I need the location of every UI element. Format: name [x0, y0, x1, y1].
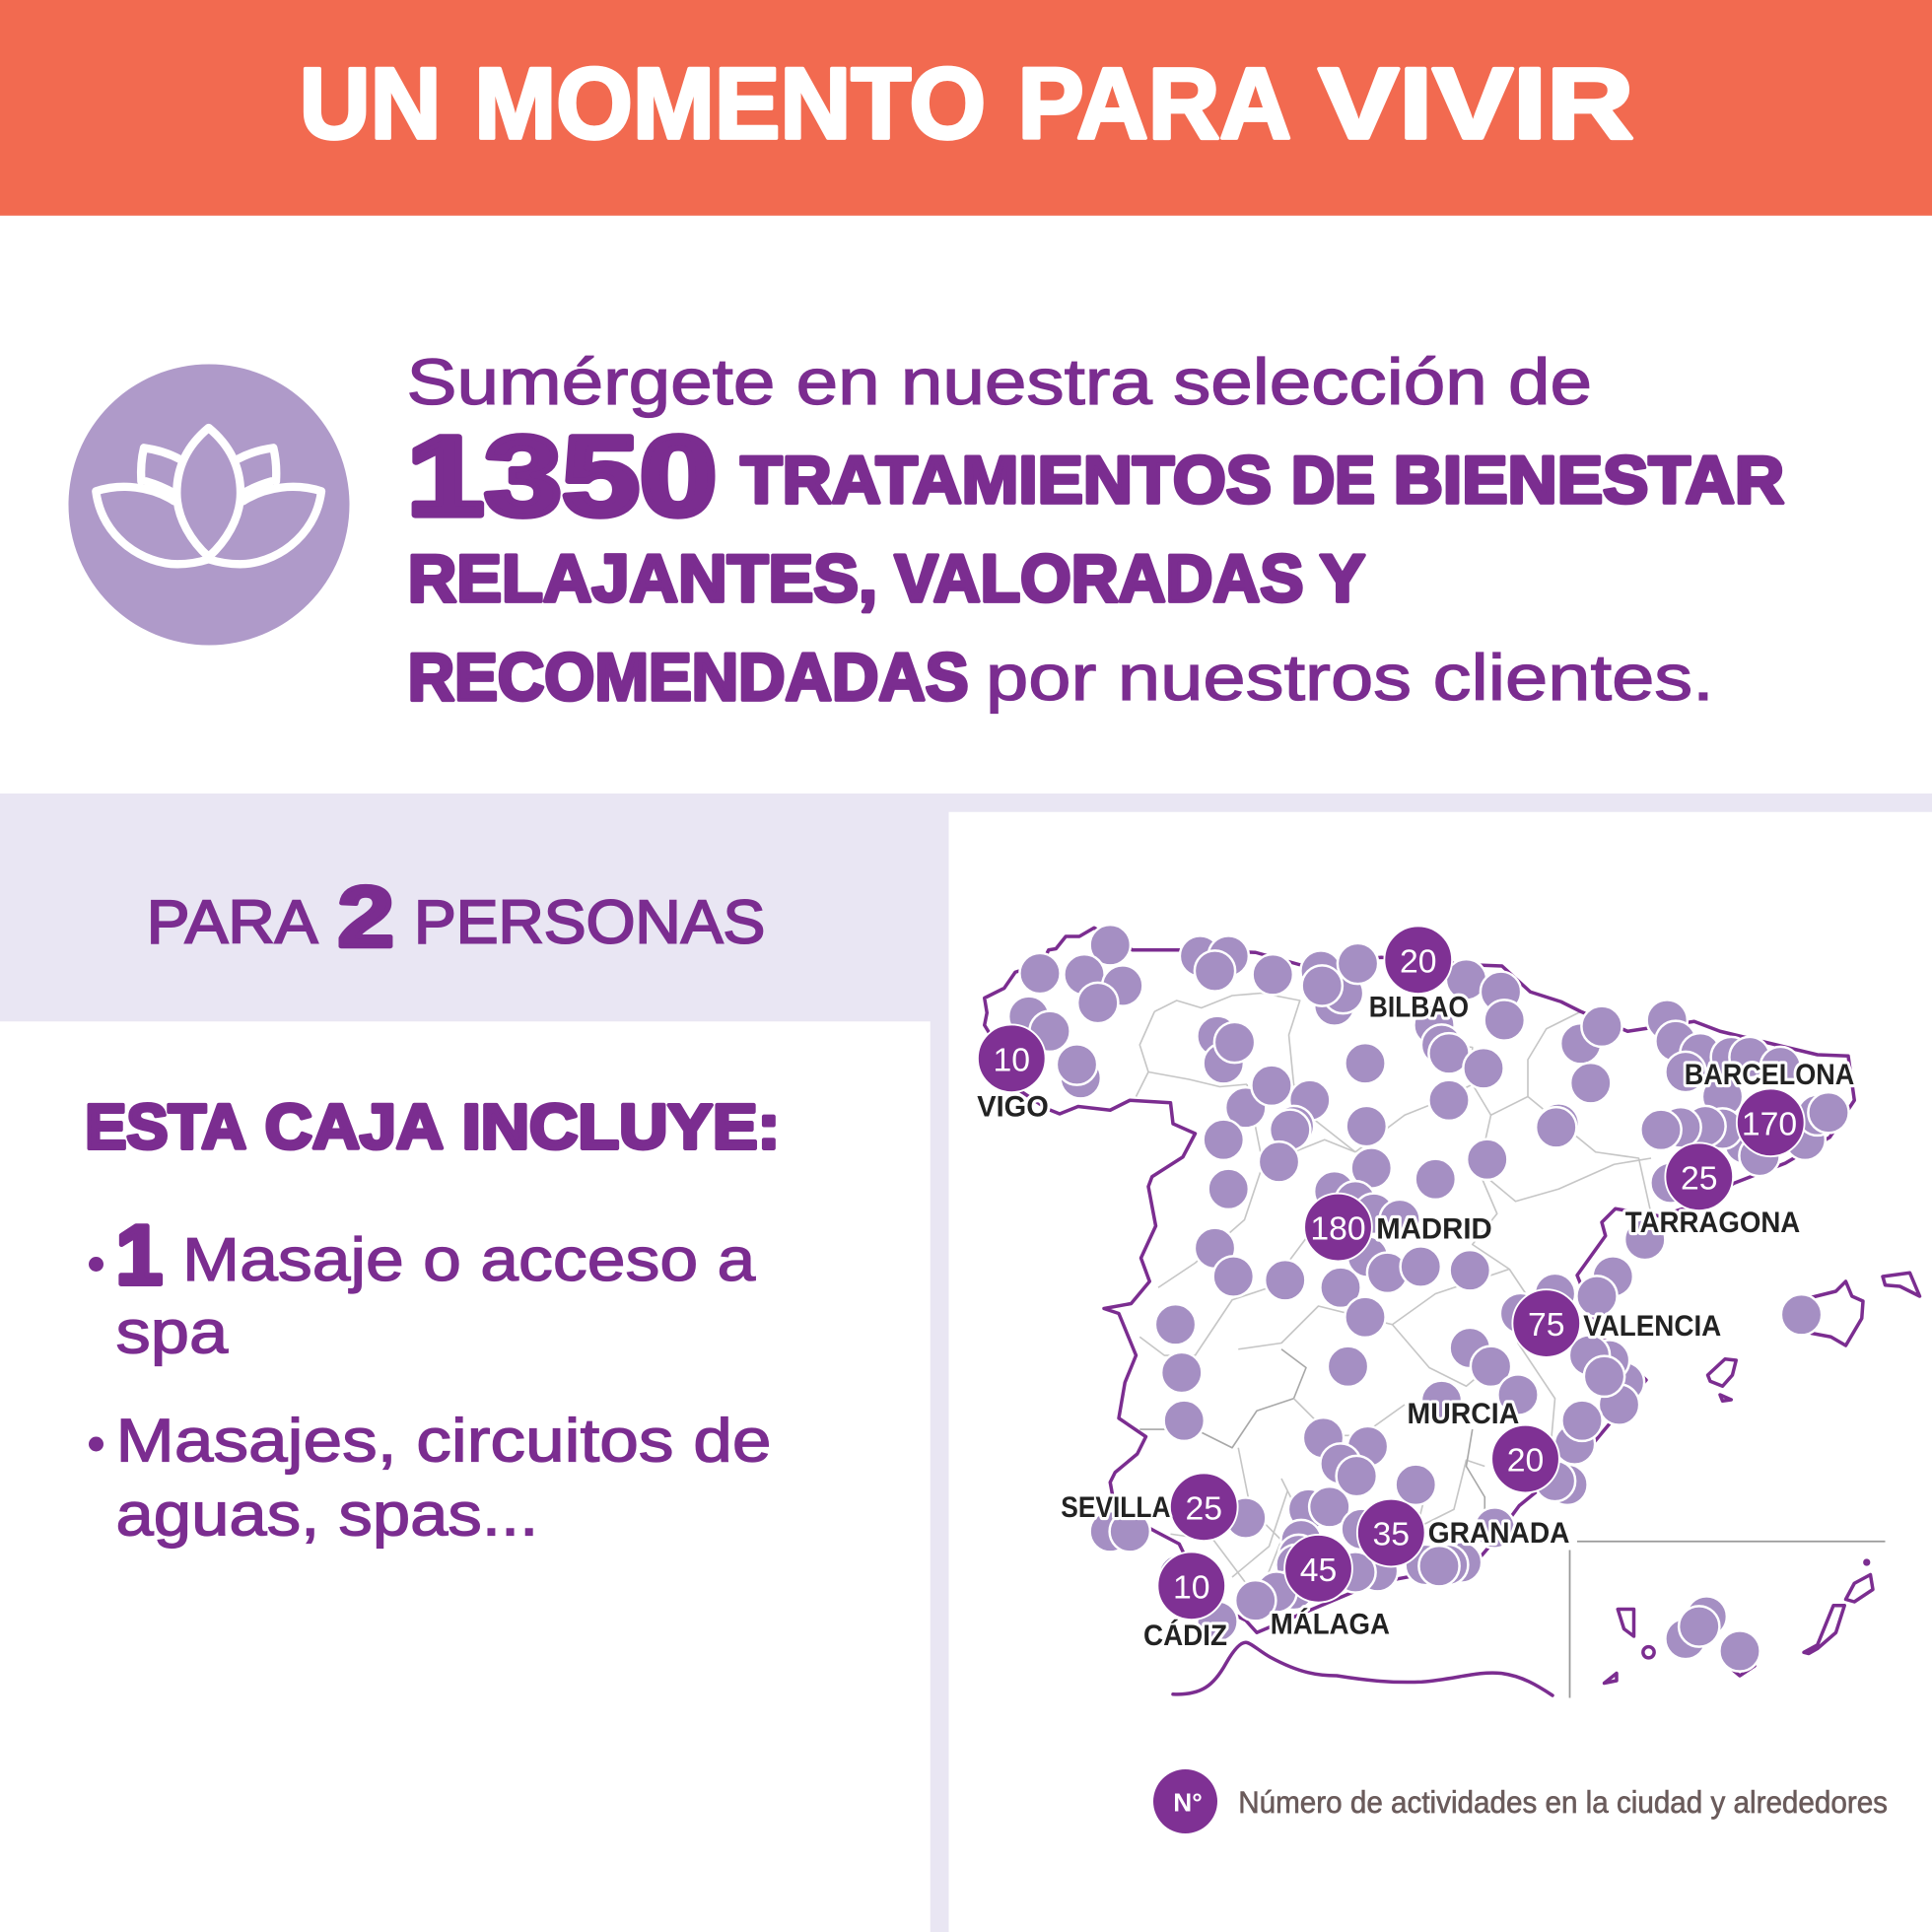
- city counts: 20: [1507, 1441, 1544, 1479]
- city counts: 180: [1310, 1210, 1366, 1247]
- canary inset frame: [1569, 1542, 1885, 1697]
- icon: lotus: [69, 365, 350, 645]
- city counts: 45: [1300, 1552, 1337, 1589]
- coast of Africa: [1173, 1642, 1552, 1695]
- city labels: BILBAO: [1369, 991, 1469, 1023]
- intro line 3: Y: [1320, 542, 1365, 616]
- canary islands: [1605, 1560, 1873, 1684]
- list item 1: [89, 1208, 756, 1367]
- title: PARA: [1017, 46, 1291, 160]
- intro text: [406, 346, 1784, 715]
- legend: [1153, 1769, 1888, 1833]
- title: [300, 46, 1634, 160]
- heading: para 2 personas: PARA: [147, 887, 318, 956]
- title: VIVIR: [1319, 46, 1634, 160]
- list item 2: aguas, spas...: [116, 1481, 538, 1550]
- legend: N°: [1173, 1788, 1203, 1818]
- lavender band: [0, 794, 1932, 1932]
- city counts: 170: [1742, 1105, 1797, 1142]
- list item 1: 1: [116, 1209, 163, 1303]
- city counts: 20: [1400, 942, 1437, 980]
- title banner: [0, 0, 1932, 216]
- city counts: 75: [1528, 1306, 1565, 1344]
- city labels: CÁDIZ: [1143, 1619, 1227, 1652]
- city labels: SEVILLA: [1061, 1491, 1171, 1524]
- list item 1: Masaje o acceso a: [182, 1225, 756, 1294]
- list item 2: [89, 1407, 771, 1550]
- city labels: GRANADA: [1428, 1517, 1569, 1550]
- city labels: TARRAGONA: [1625, 1207, 1800, 1239]
- coastline and borders: [985, 928, 1854, 1632]
- intro line 3: VALORADAS: [895, 542, 1303, 616]
- heading: para 2 personas: PERSONAS: [414, 887, 765, 956]
- intro line 2: [740, 444, 1784, 518]
- city labels: VIGO: [977, 1091, 1049, 1124]
- balearic islands: [1707, 1273, 1920, 1401]
- city labels: BARCELONA: [1685, 1059, 1854, 1091]
- intro line 1: Sumérgete en nuestra selección de: [406, 346, 1592, 419]
- heading: esta caja incluye: ESTA: [85, 1091, 246, 1162]
- city labels: VALENCIA: [1583, 1310, 1721, 1343]
- title: MOMENTO: [474, 46, 986, 160]
- intro line 3: [408, 542, 1365, 616]
- intro line 3: RELAJANTES,: [408, 542, 877, 616]
- heading: para 2 personas: 2: [337, 868, 394, 965]
- city markers: [978, 926, 1805, 1620]
- intro line 2: BIENESTAR: [1394, 444, 1784, 518]
- number 1350: 1350: [406, 414, 718, 540]
- city counts: 25: [1185, 1489, 1222, 1527]
- city labels: MURCIA: [1408, 1398, 1519, 1430]
- intro line 2: TRATAMIENTOS: [740, 444, 1272, 518]
- heading: esta caja incluye: [85, 1091, 780, 1162]
- activity dots: [1008, 925, 1849, 1672]
- list item 2: Masajes, circuitos de: [116, 1407, 771, 1476]
- map of Spain: [977, 925, 1920, 1697]
- city labels: [977, 991, 1854, 1652]
- heading: esta caja incluye: CAJA: [265, 1091, 444, 1162]
- city counts: 10: [993, 1041, 1030, 1078]
- intro line 4 end: por nuestros clientes.: [986, 642, 1714, 715]
- legend: Número de actividades en la ciudad y alrededores: [1238, 1785, 1888, 1820]
- city counts: 10: [1173, 1568, 1210, 1606]
- city labels: MADRID: [1376, 1212, 1492, 1245]
- city counts: 35: [1372, 1516, 1410, 1552]
- city counts: [993, 942, 1797, 1606]
- heading: esta caja incluye: INCLUYE:: [462, 1091, 780, 1162]
- city counts: 25: [1681, 1159, 1718, 1197]
- province borders: [1136, 994, 1651, 1602]
- list item 1: spa: [116, 1298, 229, 1367]
- title: UN: [300, 46, 442, 160]
- city labels: MÁLAGA: [1271, 1608, 1390, 1641]
- intro line 4: RECOMENDADAS: [408, 641, 968, 715]
- intro line 2: DE: [1291, 444, 1375, 518]
- heading: para 2 personas: [147, 868, 765, 965]
